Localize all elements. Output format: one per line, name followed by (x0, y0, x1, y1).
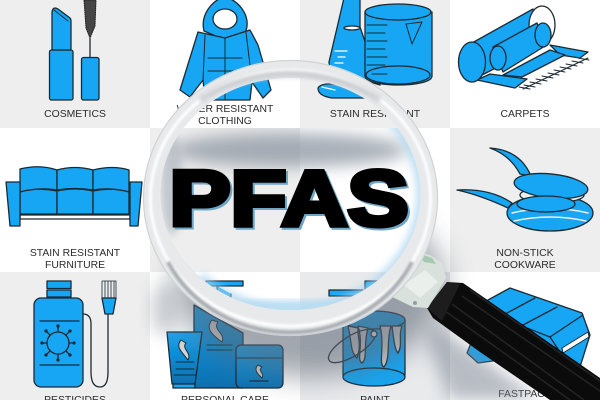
icon: sofa (6, 167, 142, 226)
icon: lipstick and mascara (50, 0, 99, 100)
label: fast food packaging: FASTPACK (498, 389, 552, 400)
lens rim (143, 60, 438, 336)
label: stain resistant furniture: STAIN RESISTANT (30, 248, 121, 259)
magnifying glass handle (427, 282, 600, 400)
label: cosmetics: COSMETICS (44, 109, 106, 120)
label: non-stick cookware: NON-STICK (496, 248, 554, 259)
lens inner glass shading (160, 128, 420, 310)
lens rim highlights (144, 60, 438, 336)
heading: PFAS: PFAS (170, 154, 408, 242)
icon: paint can (324, 281, 405, 386)
icon: fast food packaging (467, 288, 590, 367)
label: water resistant clothing: WATER RESISTANT (177, 104, 274, 115)
label: clothing second line: CLOTHING (198, 116, 252, 127)
label: furniture second line: FURNITURE (45, 260, 105, 271)
magnifying glass handle shadow (428, 320, 540, 400)
lens cast shadow (151, 193, 445, 377)
icon: non-stick pans (457, 148, 593, 231)
label: cookware second line: COOKWARE (494, 260, 556, 271)
magnifying glass collar (388, 250, 446, 308)
label: carpets: CARPETS (500, 109, 550, 120)
icon: personal care products (167, 281, 283, 388)
icon: carpets roll (458, 6, 589, 89)
label: stain resistant: STAIN RESISTANT (330, 109, 421, 120)
icon: pesticide sprayer (34, 281, 116, 387)
icon: water resistant jacket (180, 0, 271, 100)
magnifying lens (143, 60, 438, 336)
heading: PFAS: PFAS (172, 156, 410, 244)
icon: stain resistant flask and beaker (318, 0, 432, 98)
